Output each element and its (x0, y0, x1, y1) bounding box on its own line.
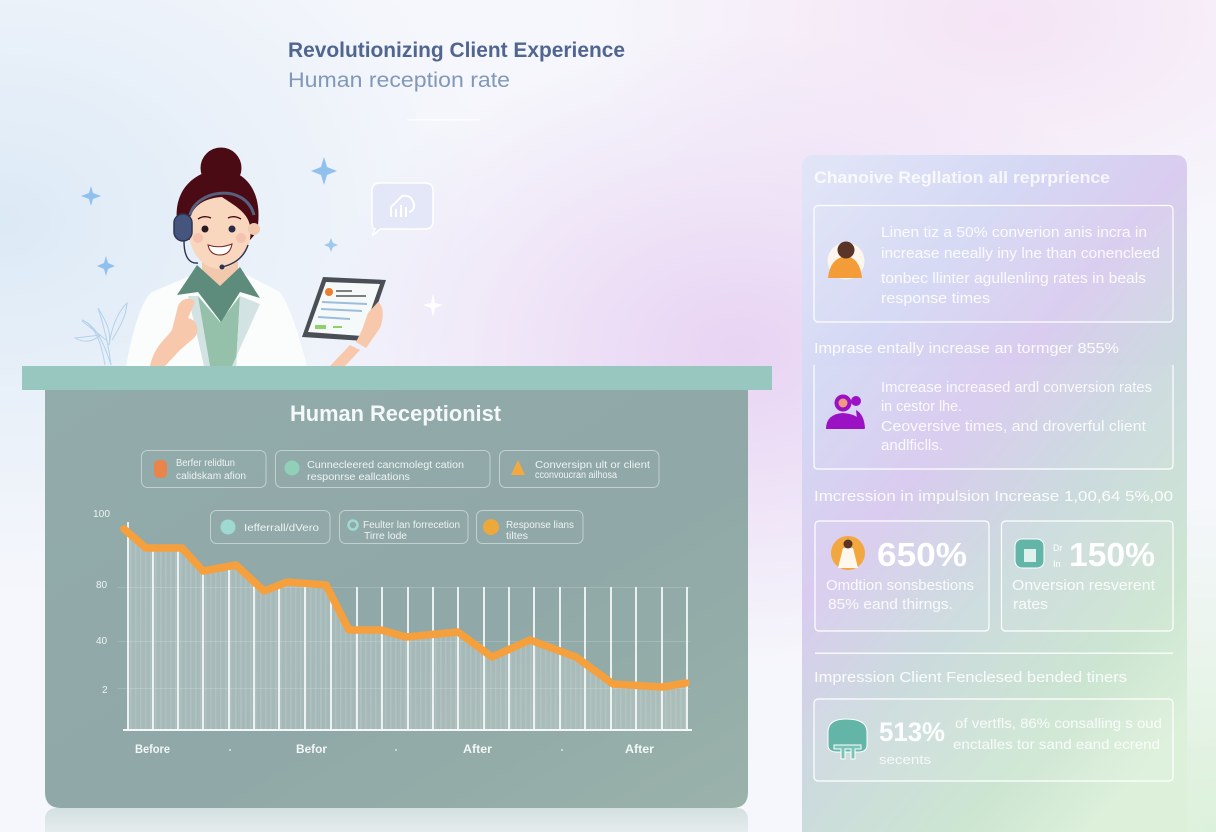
title: Revolutionizing Client Experience (288, 39, 625, 62)
card 513%: enctalles tor sand eand ecrend (953, 736, 1160, 752)
stat card 150%: Onversion resverent (1012, 578, 1155, 594)
right forearm (330, 345, 360, 366)
card 2 (814, 365, 1173, 469)
card 513%: 513% (879, 717, 945, 747)
card 2: Imcrease increased ardl conversion rates (881, 379, 1152, 396)
icon: teal device (1015, 539, 1044, 568)
line chart: After (463, 742, 492, 756)
chip text: Feulter lan forrecetion (363, 520, 460, 531)
icon: sparkles (81, 157, 443, 317)
illustration: receptionist (126, 148, 386, 366)
stat card 650%: Omdtion sonsbestions (826, 578, 974, 594)
side heading: Chanoive Regllation all reprprience (814, 168, 1110, 187)
card 1: tonbec llinter agullenling rates in beals (881, 270, 1146, 287)
stat card 150%: 150% (1069, 536, 1155, 573)
title: Human reception rate (288, 69, 510, 92)
subheading 4: Impression Client Fenclesed bended tiners (814, 669, 1127, 686)
headset (174, 193, 254, 270)
axis labels (93, 509, 110, 696)
stat card 150%: Dr (1053, 543, 1062, 553)
hair bun and hair (177, 148, 259, 240)
axis labels: 40 (96, 636, 108, 647)
tablet hand (356, 302, 383, 348)
icon: teal building (828, 719, 867, 759)
icon: round orange person (831, 536, 865, 570)
icon: plant outline (75, 303, 127, 365)
line chart: Befor (296, 742, 327, 756)
card 1: Linen tiz a 50% converion anis incra in (881, 224, 1147, 241)
line chart (93, 509, 692, 756)
white coat (126, 274, 307, 366)
shirt (198, 296, 240, 366)
chip icons (154, 460, 525, 535)
panel heading: Human Receptionist (290, 401, 502, 426)
chip text: tiltes (506, 531, 528, 542)
area under line (127, 533, 688, 730)
icon: speech bubble (372, 183, 433, 236)
chip text: Berfer relidtun (176, 458, 235, 469)
trend line (124, 529, 686, 687)
card 2: in cestor lhe. (881, 398, 962, 415)
chips outline (142, 450, 659, 544)
neck (202, 255, 238, 292)
face (189, 197, 251, 269)
card 2: andlficlls. (881, 437, 943, 454)
chip text: Response lians (506, 520, 574, 531)
card 2: Ceoversive times, and droverful client (881, 418, 1147, 435)
stat card 650%: 650% (877, 536, 967, 573)
card 1 (814, 206, 1173, 322)
stat card 650% (815, 521, 989, 631)
chip text: cconvoucran ailhosa (535, 470, 617, 481)
subheading 3: Imcression in impulsion Increase 1,00,64 5%,00 (814, 488, 1173, 505)
pointing hand (150, 299, 197, 366)
stat card 650%: 85% eand thirngs. (828, 597, 953, 613)
chip text: responrse eallcations (307, 472, 410, 483)
card 513% (814, 699, 1173, 781)
subheading 2: Imprase entally increase an tormger 855% (814, 340, 1119, 357)
icon: person orange (828, 242, 864, 280)
grid (118, 588, 690, 688)
axis labels: 2 (102, 685, 108, 696)
card 513%: of vertfls, 86% consalling s oud (955, 715, 1162, 731)
card 513%: secents (879, 752, 932, 767)
card 1: increase neeally iny lne than conencleed (881, 245, 1160, 262)
baseline (123, 729, 692, 731)
chip text: Conversipn ult or client (535, 460, 650, 471)
axis labels: 80 (96, 580, 108, 591)
stat card 150%: In (1053, 559, 1061, 569)
tablet (302, 277, 386, 341)
chip text: Tirre lode (364, 531, 407, 542)
icon: people purple (826, 394, 865, 429)
chip text: Cunnecleered cancmolegt cation (307, 460, 464, 471)
panel: client experience summary (802, 155, 1187, 832)
desk top (22, 366, 772, 390)
collar (177, 265, 260, 322)
chip text (176, 458, 650, 542)
stat card 150% (1002, 521, 1173, 631)
card 1: response times (881, 290, 990, 307)
bars (128, 522, 687, 730)
stat card 150%: rates (1013, 597, 1048, 613)
lapels (188, 296, 210, 366)
line chart: After (625, 742, 654, 756)
panel reflection (45, 808, 748, 832)
line chart: Before (135, 742, 170, 756)
axis labels: 100 (93, 509, 110, 520)
chip text: Iefferrall/dVero (244, 523, 320, 534)
panel: human receptionist (22, 366, 772, 808)
title (288, 39, 625, 92)
chip text: calidskam afion (176, 471, 246, 482)
